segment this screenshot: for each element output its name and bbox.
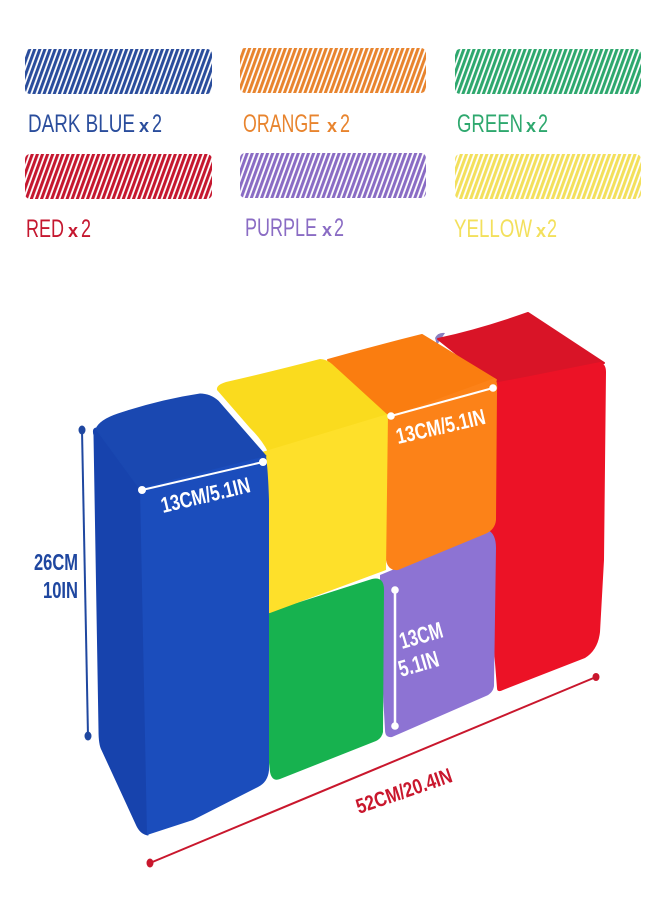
label: green x 2: GREEN xyxy=(457,110,523,138)
swatch: red xyxy=(25,154,212,199)
dimension: purple block height 13cm xyxy=(391,586,446,730)
label: orange x 2: ORANGE xyxy=(243,110,320,138)
block: yellow xyxy=(217,359,389,614)
dimension: orange block width 13cm: 13CM/5.1IN xyxy=(394,404,488,449)
label: yellow x 2: 2 xyxy=(547,215,557,243)
block: dark blue xyxy=(93,394,269,835)
block: green xyxy=(262,578,384,780)
label: orange x 2: 2 xyxy=(340,110,350,138)
dimension: blue block width 13cm xyxy=(138,458,267,518)
label: orange x 2: x xyxy=(327,116,337,136)
foam blocks xyxy=(93,313,606,835)
label: purple x 2: x xyxy=(322,220,332,240)
swatch: green xyxy=(455,49,641,94)
label: purple x 2: 2 xyxy=(334,214,344,242)
swatch: yellow xyxy=(455,154,641,199)
dimension: total length 52cm: 52CM/20.4IN xyxy=(353,764,455,819)
dimension: total length 52cm xyxy=(146,673,600,868)
label: green x 2: 2 xyxy=(538,110,548,138)
swatch: purple xyxy=(240,153,426,198)
block: orange xyxy=(328,335,497,570)
dimension: height 26cm xyxy=(34,426,92,740)
label: red x 2: RED xyxy=(26,215,64,243)
label: purple x 2: PURPLE xyxy=(245,214,317,242)
label: yellow x 2: YELLOW xyxy=(454,215,532,243)
label: dark blue x 2: 2 xyxy=(152,110,162,138)
dimension: height 26cm: 10IN xyxy=(43,577,78,603)
label: red x 2: x xyxy=(68,221,78,241)
block: red xyxy=(435,313,606,691)
dimension: blue block width 13cm: 13CM/5.1IN xyxy=(158,472,253,518)
label: dark blue x 2: x xyxy=(139,116,149,136)
dimension: purple block height 13cm: 13CM xyxy=(396,617,446,654)
label: dark blue x 2: DARK BLUE xyxy=(28,110,135,138)
colour legend xyxy=(25,48,641,243)
dimension: height 26cm: 26CM xyxy=(34,549,78,575)
dimension: orange block width 13cm xyxy=(387,384,497,449)
dimension: purple block height 13cm: 5.1IN xyxy=(395,646,442,682)
label: green x 2: x xyxy=(526,116,536,136)
label: red x 2: 2 xyxy=(81,215,91,243)
label: yellow x 2: x xyxy=(536,221,546,241)
swatch: orange xyxy=(240,48,426,93)
block: purple xyxy=(380,530,496,737)
swatch: dark blue xyxy=(25,49,212,94)
